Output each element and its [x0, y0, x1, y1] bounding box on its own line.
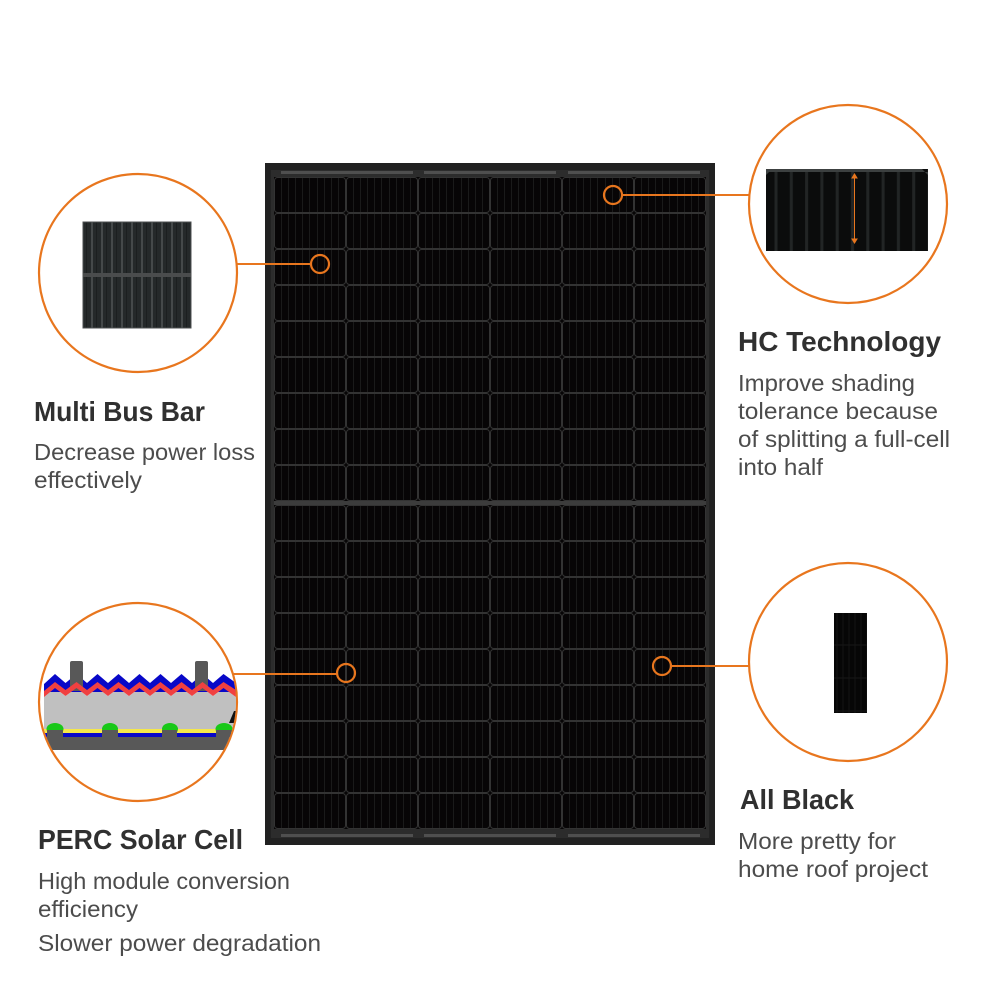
- description: [738, 828, 929, 882]
- bottom bus strips: [281, 834, 700, 837]
- description: High module conversion: [38, 868, 290, 894]
- connector: [671, 665, 749, 667]
- HC circle: [749, 105, 947, 303]
- marker: [653, 657, 671, 675]
- description: [738, 370, 950, 480]
- PERC circle: [39, 603, 237, 801]
- HC half-cell image: [766, 169, 928, 251]
- all black mini panel: [834, 613, 867, 713]
- inner frame: [271, 170, 709, 838]
- panel frame: [265, 163, 715, 845]
- callout: HC technology: [604, 105, 947, 303]
- text: PERC solar cell: [38, 824, 321, 956]
- description: effectively: [34, 467, 143, 493]
- bottom half cells: [274, 505, 706, 829]
- heading: Multi Bus Bar: [34, 396, 205, 427]
- callout: multi bus bar: [39, 174, 329, 372]
- callout: all black: [653, 563, 947, 761]
- description: Improve shading: [738, 370, 915, 396]
- heading: All Black: [740, 784, 854, 815]
- connector: [622, 194, 749, 196]
- description: Decrease power loss: [34, 439, 255, 465]
- centre bus bar: [274, 501, 706, 505]
- description: More pretty for: [738, 828, 896, 854]
- text: HC technology: [738, 326, 950, 480]
- description: [34, 439, 255, 493]
- heading: PERC Solar Cell: [38, 824, 243, 855]
- solar panel: [265, 163, 715, 845]
- top bus strips: [281, 171, 700, 174]
- description: [38, 868, 321, 956]
- all black circle: [749, 563, 947, 761]
- description: into half: [738, 454, 824, 480]
- description: of splitting a full-cell: [738, 426, 950, 452]
- PERC cross-section: [44, 661, 236, 750]
- description: home roof project: [738, 856, 929, 882]
- text: all black: [738, 784, 929, 882]
- text: multi bus bar: [34, 396, 255, 493]
- multi bus bar cell image: [83, 222, 191, 328]
- top half cells: [274, 177, 706, 501]
- callout: PERC solar cell: [30, 603, 355, 801]
- description: Slower power degradation: [38, 930, 321, 956]
- multi bus bar circle: [39, 174, 237, 372]
- marker: [337, 664, 355, 682]
- description: efficiency: [38, 896, 139, 922]
- description: tolerance because: [738, 398, 938, 424]
- marker: [604, 186, 622, 204]
- heading: HC Technology: [738, 326, 941, 357]
- double arrow: [852, 174, 857, 243]
- marker: [311, 255, 329, 273]
- connector: [237, 263, 311, 265]
- connector: [233, 673, 337, 675]
